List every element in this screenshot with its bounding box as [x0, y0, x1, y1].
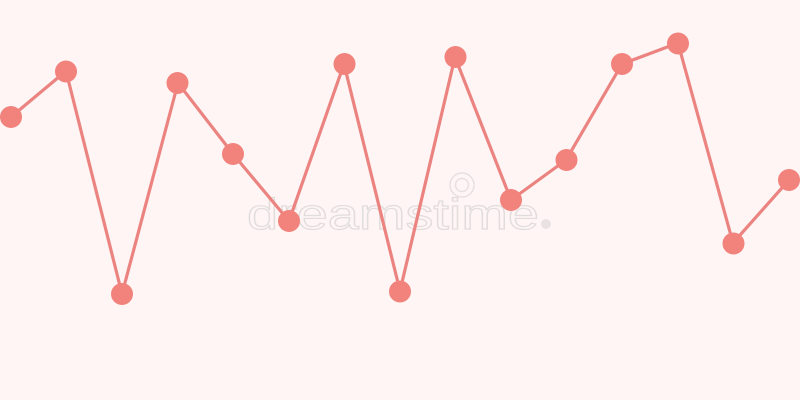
data points — [0, 32, 800, 305]
watermark: dreamstime — [247, 190, 539, 239]
line chart — [0, 32, 800, 305]
line series — [11, 43, 789, 294]
watermark — [247, 173, 551, 239]
